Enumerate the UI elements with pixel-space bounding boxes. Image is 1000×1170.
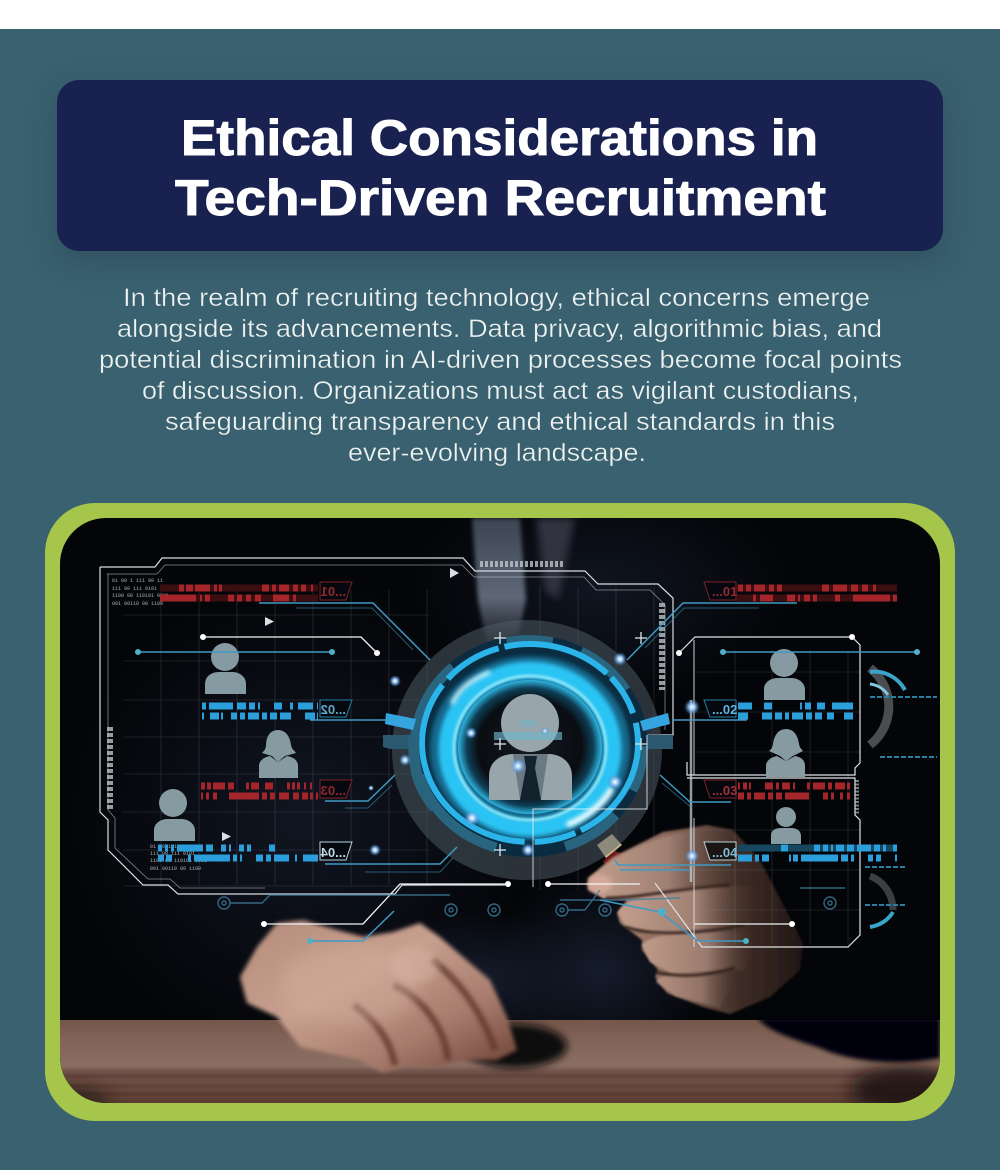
numbered tags, mirrored on the left: ...02 [712, 702, 737, 717]
node dots [135, 634, 920, 944]
icon: central person [489, 694, 572, 800]
jacket and shirt [70, 480, 790, 1070]
numbered tags, mirrored on the left: ...01 [321, 584, 346, 599]
icons: right side people [764, 649, 805, 844]
intro paragraph: ever-evolving landscape. [348, 439, 646, 467]
plus marks and arrows [222, 568, 647, 856]
title [175, 110, 826, 226]
numbered tags, mirrored on the left: ...03 [321, 783, 346, 798]
binary readouts: 01 00 1 111 00 11 [112, 578, 163, 584]
intro paragraph: of discussion. Organizations must act as vigilant custodians, [142, 377, 859, 405]
binary readouts [112, 578, 207, 872]
left HUD frame [100, 558, 673, 894]
left hand [240, 920, 567, 1073]
tick columns [110, 564, 857, 815]
connector lines white with dots [203, 637, 792, 924]
magnifier handle [597, 834, 640, 880]
intro paragraph: potential discrimination in AI-driven processes become focal points [99, 346, 902, 374]
right hand [588, 825, 803, 1014]
title: Tech-Driven Recruitment [175, 170, 826, 226]
binary readouts: 01 00 1 111 00 11 [150, 844, 201, 850]
intro paragraph: safeguarding transparency and ethical standards in this [165, 408, 835, 436]
numbered tags, mirrored on the left: ...04 [712, 845, 738, 860]
blue data bars [158, 706, 897, 858]
right HUD frames [655, 637, 860, 947]
connector lines blue [138, 603, 917, 941]
wooden table [30, 1018, 960, 1114]
intro paragraph: alongside its advancements. Data privacy, algorithmic bias, and [117, 315, 882, 343]
numbered tags, mirrored on the left: ...03 [712, 783, 737, 798]
numbered tags, mirrored on the left: ...01 [712, 584, 737, 599]
bottom circuit icons [218, 888, 845, 916]
faint grid [123, 587, 860, 945]
title: Ethical Considerations in [181, 110, 818, 166]
binary readouts: 1100 00 110101 0001 [150, 858, 207, 864]
red data bars [160, 588, 897, 796]
numbered tags, mirrored on the left [320, 582, 738, 860]
binary readouts: 1100 00 110101 0001 [112, 593, 169, 599]
photo background [60, 518, 940, 1103]
binary readouts: 111 00 111 0101 [112, 586, 157, 592]
binary readouts: 001 00110 00 1100 [112, 601, 163, 607]
panel: framed photo [45, 503, 955, 1121]
intro paragraph [99, 284, 902, 467]
side gauges [865, 668, 937, 927]
binary readouts: 111 00 111 0101 [150, 851, 195, 857]
numbered tags, mirrored on the left: ...04 [320, 845, 346, 860]
intro paragraph: In the realm of recruiting technology, ethical concerns emerge [123, 284, 870, 312]
glass lens [383, 620, 673, 880]
icons: left side people [154, 643, 298, 841]
title panel [57, 80, 943, 251]
binary readouts: 001 00110 00 1100 [150, 866, 201, 872]
numbered tags, mirrored on the left: ...02 [321, 702, 346, 717]
